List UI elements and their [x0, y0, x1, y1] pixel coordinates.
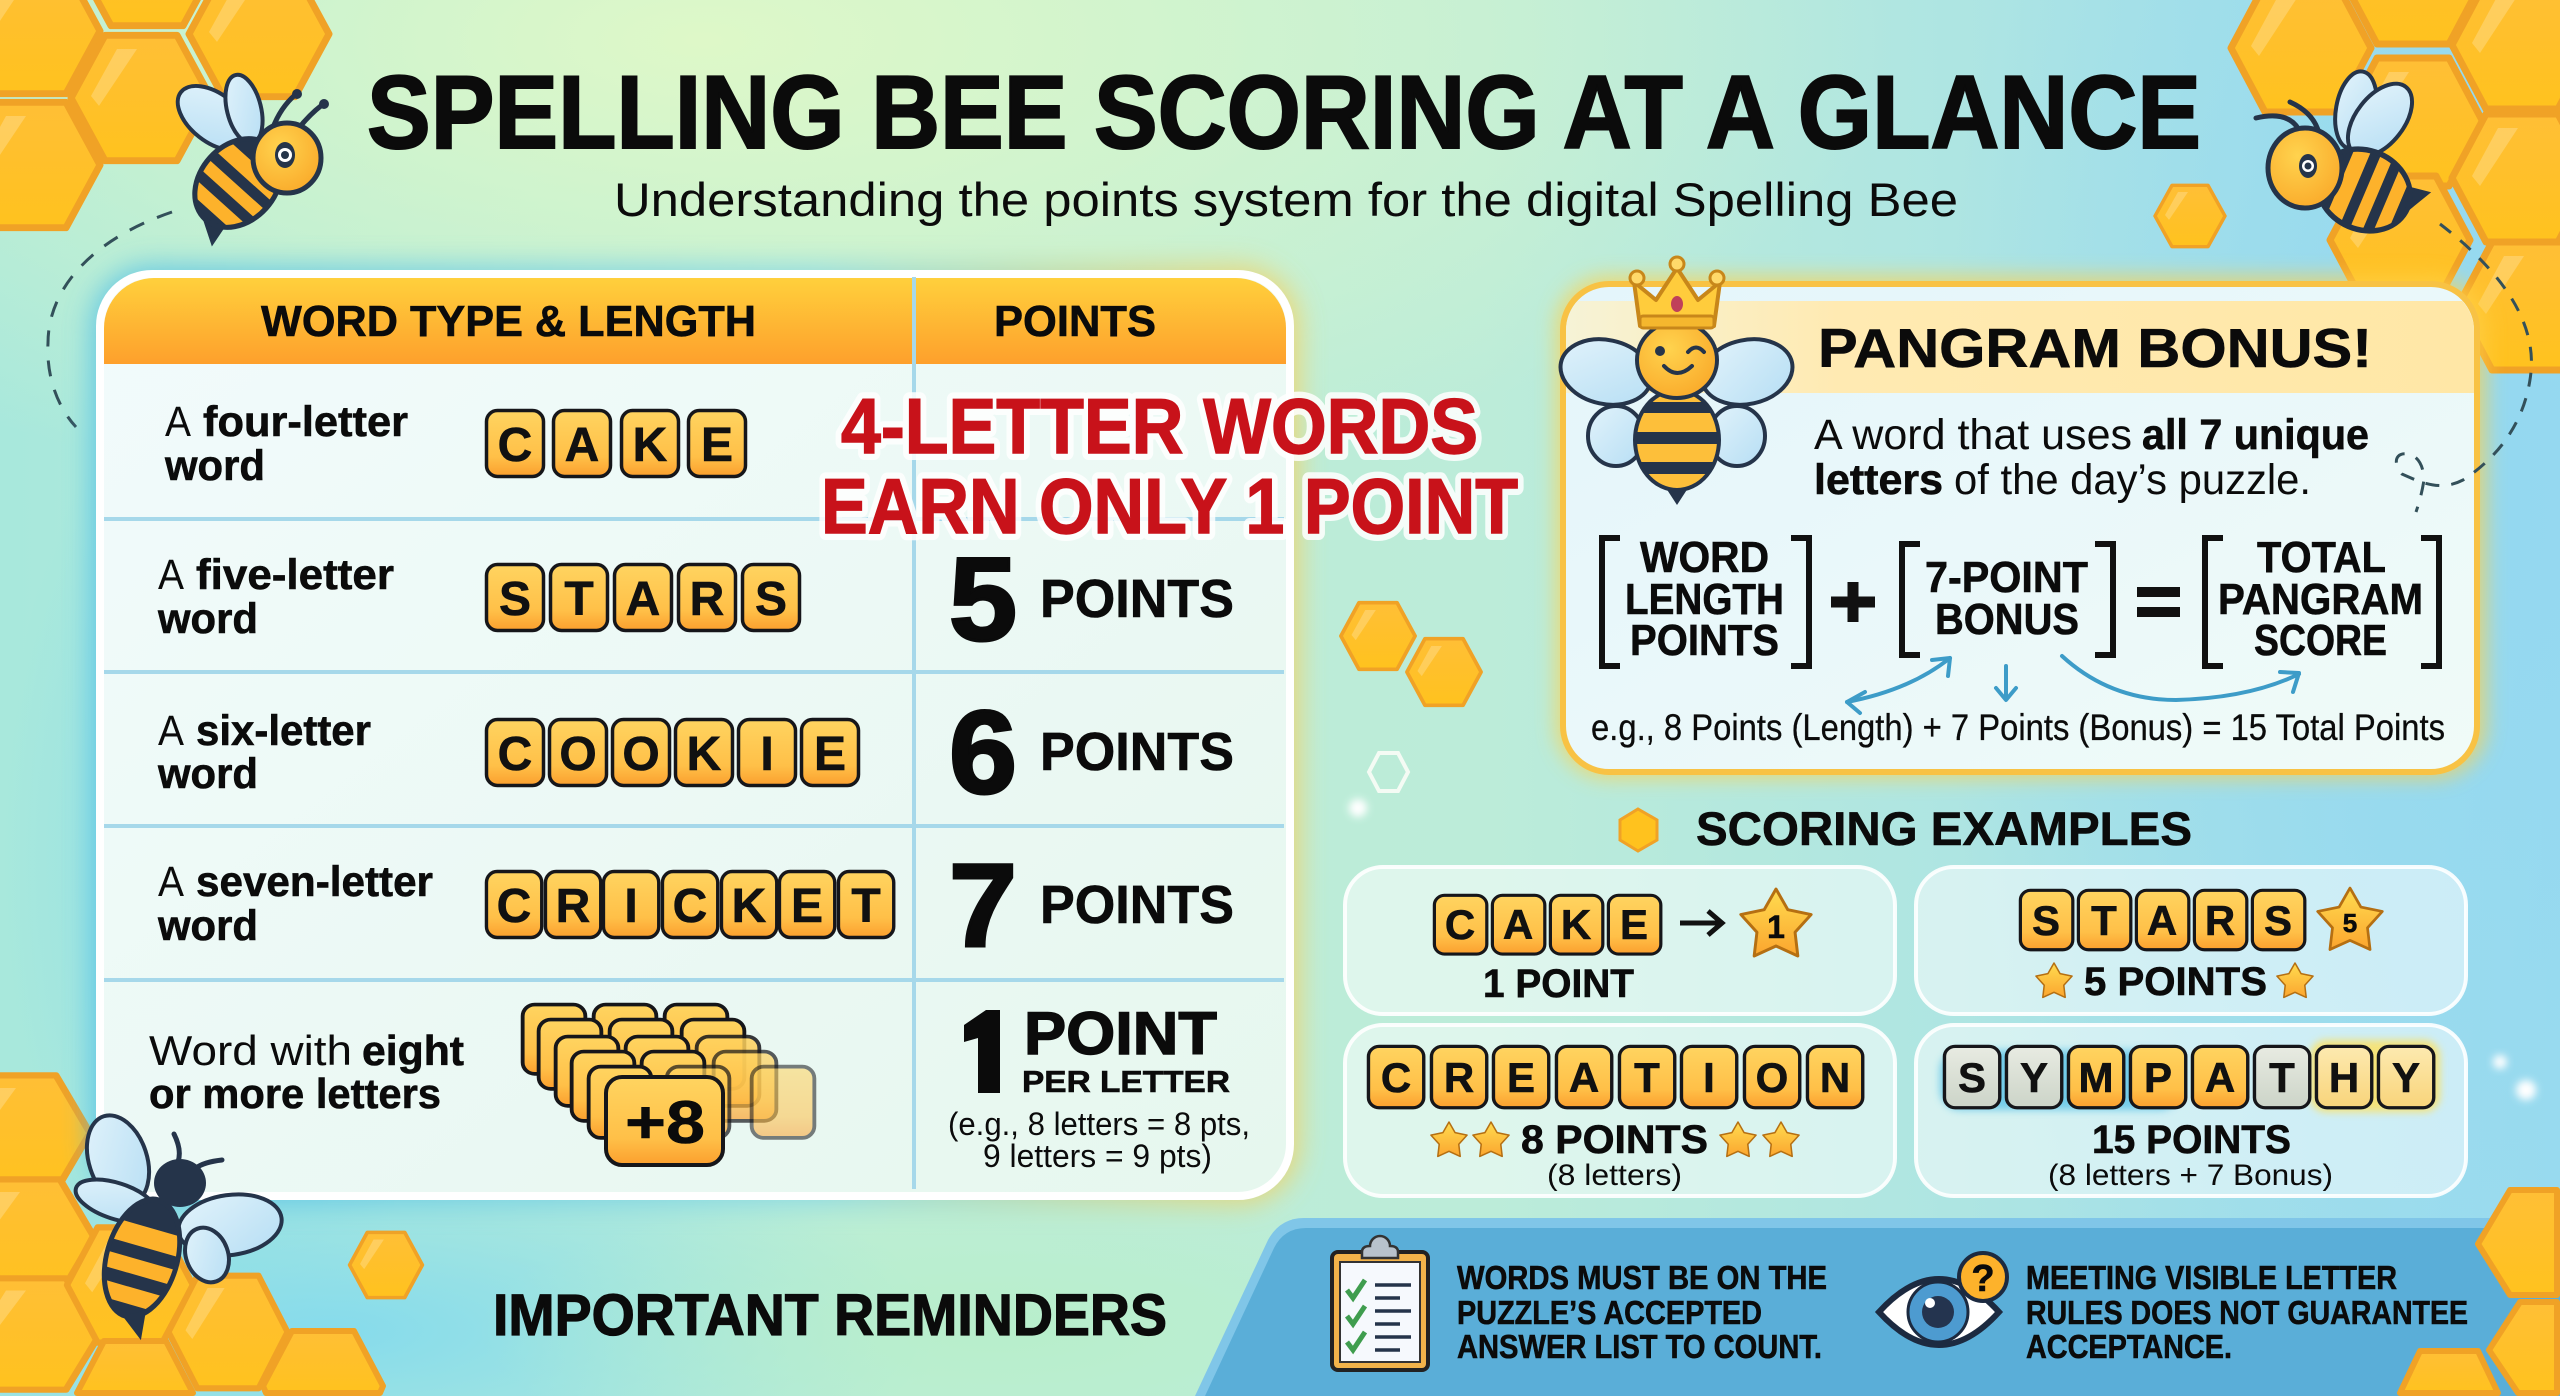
example card: CREATION: I	[1703, 1054, 1715, 1101]
row: seven-letter word: E	[791, 880, 823, 933]
row: six-letter word: O	[559, 728, 597, 781]
pangram example: e.g., 8 Points (Length) + 7 Points (Bonus) = 15 Total Points	[1591, 707, 2445, 748]
row: seven-letter word: word	[157, 902, 258, 950]
reminder: accepted answer list	[1457, 1259, 1827, 1365]
icon: clipboard checklist	[1332, 1236, 1428, 1370]
reminder: accepted answer list: WORDS MUST BE ON THE	[1457, 1259, 1827, 1296]
panel: pangram bonus	[1554, 257, 2486, 778]
row: five-letter word	[157, 534, 1234, 666]
row: five-letter word: 5	[949, 534, 1017, 666]
example card: CREATION	[1345, 1025, 1895, 1196]
row: five-letter word: R	[690, 573, 724, 626]
row: six-letter word: A	[158, 707, 184, 755]
pangram formula: BONUS	[1935, 595, 2079, 644]
example card: CREATION: T	[1634, 1054, 1660, 1101]
row: eight or more letters: 9 letters = 9 pts)	[983, 1138, 1212, 1174]
example card: CAKE: A	[1503, 901, 1533, 948]
row: eight or more letters: PER LETTER	[1022, 1064, 1230, 1099]
pangram formula: TOTAL	[2257, 533, 2386, 582]
reminder: accepted answer list: ANSWER LIST TO COUNT.	[1457, 1328, 1822, 1365]
pangram definition: of the day’s puzzle.	[1954, 456, 2311, 504]
row: seven-letter word: A	[158, 858, 184, 906]
row: five-letter word: A	[626, 573, 660, 626]
row: seven-letter word: I	[624, 880, 638, 933]
panel heading band	[1566, 301, 2474, 393]
example card: SYMPATHY: Y	[2392, 1054, 2420, 1101]
row: eight or more letters: eight	[362, 1027, 464, 1074]
row: six-letter word: O	[622, 728, 660, 781]
row: eight or more letters: (e.g., 8 letters = 8 pts,	[948, 1106, 1250, 1142]
row: four-letter word: word	[164, 442, 265, 490]
example card: SYMPATHY: H	[2329, 1054, 2359, 1101]
row: five-letter word: POINTS	[1040, 569, 1234, 629]
example card: CAKE: C	[1445, 901, 1475, 948]
honeycomb: bottom left	[0, 1075, 383, 1393]
panel heading band: PANGRAM BONUS!	[1818, 317, 2372, 379]
callout: 4-letter words earn only 1 point: EARN ONLY 1 POINT	[821, 462, 1518, 550]
row: four-letter word	[164, 398, 745, 490]
row: seven-letter word	[157, 840, 1234, 972]
row: seven-letter word: POINTS	[1040, 875, 1234, 935]
pangram definition: letters	[1814, 456, 1943, 504]
callout: 4-letter words earn only 1 point: 4-LETTER WORDS	[841, 382, 1478, 470]
title: SPELLING BEE SCORING AT A GLANCE	[367, 55, 2201, 171]
example card: CREATION: E	[1507, 1054, 1535, 1101]
row: four-letter word: A	[165, 398, 191, 446]
floating honeycomb cell top right	[2155, 185, 2225, 247]
row: five-letter word: T	[564, 573, 594, 626]
row: six-letter word: E	[814, 728, 846, 781]
row: six-letter word: word	[157, 750, 258, 798]
example card: SYMPATHY: T	[2269, 1054, 2295, 1101]
example card: STARS: R	[2205, 897, 2235, 944]
arrows: formula flow	[1847, 656, 2299, 713]
example card: STARS: A	[2147, 897, 2177, 944]
callout: 4-letter words earn only 1 point: 4-LETTER WORDS	[841, 382, 1478, 470]
honeycomb: top left	[0, 0, 329, 228]
example card: STARS: S	[2032, 897, 2060, 944]
example card: CREATION: O	[1756, 1054, 1788, 1101]
floating honeycomb cell bottom left	[350, 1232, 422, 1298]
row: four-letter word: four-letter	[203, 398, 408, 446]
example card: CAKE: E	[1620, 901, 1648, 948]
floating honeycomb cells centre	[1341, 603, 1481, 705]
pangram formula: LENGTH	[1625, 575, 1784, 624]
row: four-letter word: K	[633, 419, 668, 472]
icon: crown	[1630, 257, 1724, 328]
icon: stacked letter tiles with +8: +8	[625, 1089, 705, 1156]
row: six-letter word: POINTS	[1040, 722, 1234, 782]
example card: CAKE: 1 POINT	[1483, 962, 1634, 1006]
pangram definition: all 7 unique	[2142, 411, 2369, 459]
row: five-letter word: five-letter	[196, 551, 394, 599]
example card: STARS: 5	[2343, 908, 2357, 938]
row: seven-letter word: 7	[949, 840, 1017, 972]
row: seven-letter word: C	[673, 880, 707, 933]
panel: word type and points table	[92, 266, 1298, 1204]
pangram formula: SCORE	[2254, 616, 2387, 665]
row: six-letter word: 6	[949, 687, 1017, 819]
row: four-letter word: C	[498, 419, 532, 472]
icon: eye with question mark	[1879, 1253, 2007, 1345]
pangram formula: WORD	[1640, 533, 1769, 582]
icon: eye with question mark: ?	[1971, 1258, 1995, 1300]
pangram formula	[1602, 533, 2439, 666]
pangram definition	[1814, 411, 2369, 504]
row: seven-letter word: T	[851, 880, 881, 933]
row: four-letter word: A	[565, 419, 599, 472]
icon: queen bee with crown	[1554, 257, 1799, 505]
reminder: visible letter rules	[2026, 1259, 2468, 1365]
example card: STARS: 5 POINTS	[2084, 960, 2267, 1004]
row: eight or more letters: POINT	[1024, 1000, 1217, 1067]
decorative outline hexagon and sparkles	[1349, 753, 2536, 1100]
table header: POINTS	[994, 297, 1156, 346]
example card: STARS: T	[2091, 897, 2117, 944]
table header	[104, 278, 1286, 364]
example card: STARS	[1916, 867, 2466, 1014]
row: eight or more letters: or more letters	[149, 1070, 441, 1117]
row: six-letter word	[157, 687, 1234, 819]
row: six-letter word: I	[760, 728, 774, 781]
example card: SYMPATHY: P	[2144, 1054, 2172, 1101]
example card: SYMPATHY: M	[2078, 1054, 2114, 1101]
example card: STARS: S	[2264, 897, 2292, 944]
row: five-letter word: A	[158, 551, 184, 599]
example card: SYMPATHY: (8 letters + 7 Bonus)	[2048, 1159, 2333, 1192]
table header: WORD TYPE & LENGTH	[261, 297, 756, 346]
reminder: visible letter rules: RULES DOES NOT GUARANTEE	[2026, 1294, 2468, 1331]
row: five-letter word: S	[499, 573, 531, 626]
callout: 4-letter words earn only 1 point: EARN ONLY 1 POINT	[821, 462, 1518, 550]
callout: 4-letter words earn only 1 point	[821, 382, 1518, 550]
row: six-letter word: C	[498, 728, 532, 781]
row: five-letter word: word	[157, 595, 258, 643]
row: seven-letter word: C	[497, 880, 531, 933]
row: seven-letter word: seven-letter	[196, 858, 433, 906]
example card: CAKE: 1	[1767, 909, 1785, 945]
example card: CAKE: K	[1561, 901, 1591, 948]
honeycomb: bottom right	[2400, 1190, 2557, 1393]
example card: SYMPATHY: 15 POINTS	[2092, 1118, 2291, 1162]
bee: top right	[2256, 68, 2439, 255]
bee: top left	[164, 71, 329, 259]
row: six-letter word: K	[687, 728, 722, 781]
example card: CREATION: 8 POINTS	[1521, 1118, 1708, 1162]
dashed flight path right	[2396, 224, 2531, 512]
example card: SYMPATHY: Y	[2020, 1054, 2048, 1101]
row: eight or more letters: Word with	[149, 1027, 352, 1074]
example card: CREATION: (8 letters)	[1547, 1159, 1682, 1192]
pangram formula: 7-POINT	[1925, 553, 2088, 602]
example card: CREATION: C	[1381, 1054, 1411, 1101]
icon: stacked letter tiles with +8	[523, 1005, 814, 1165]
example card: CAKE	[1345, 867, 1895, 1014]
honeycomb: top right	[2231, 0, 2560, 370]
pangram definition: A word that uses	[1814, 411, 2132, 459]
pangram formula: POINTS	[1630, 616, 1779, 665]
dashed flight path left	[48, 212, 172, 427]
example card: SYMPATHY: A	[2205, 1054, 2235, 1101]
row: four-letter word: E	[701, 419, 733, 472]
subtitle: Understanding the points system for the digital Spelling Bee	[614, 173, 1958, 226]
example card: SYMPATHY: S	[1958, 1054, 1986, 1101]
row: eight or more letters	[149, 1000, 1250, 1174]
table card	[100, 274, 1290, 1196]
row: six-letter word: six-letter	[196, 707, 371, 755]
row: five-letter word: S	[755, 573, 787, 626]
pangram formula: PANGRAM	[2218, 575, 2423, 624]
panel: important reminders band	[1195, 1218, 2560, 1396]
example card: CREATION: R	[1444, 1054, 1474, 1101]
bee: bottom left	[70, 1107, 286, 1345]
panel glow	[92, 266, 1298, 1204]
example card: CREATION: A	[1569, 1054, 1599, 1101]
reminder: accepted answer list: PUZZLE’S ACCEPTED	[1457, 1294, 1762, 1331]
reminder: visible letter rules: MEETING VISIBLE LETTER	[2026, 1259, 2397, 1296]
example card: SYMPATHY	[1916, 1025, 2466, 1196]
row: seven-letter word: R	[556, 880, 590, 933]
row: seven-letter word: K	[732, 880, 767, 933]
example card: CREATION: N	[1820, 1054, 1850, 1101]
reminder: visible letter rules: ACCEPTANCE.	[2026, 1328, 2232, 1365]
heading: important reminders: IMPORTANT REMINDERS	[493, 1283, 1167, 1348]
heading: scoring examples: SCORING EXAMPLES	[1696, 802, 2192, 855]
